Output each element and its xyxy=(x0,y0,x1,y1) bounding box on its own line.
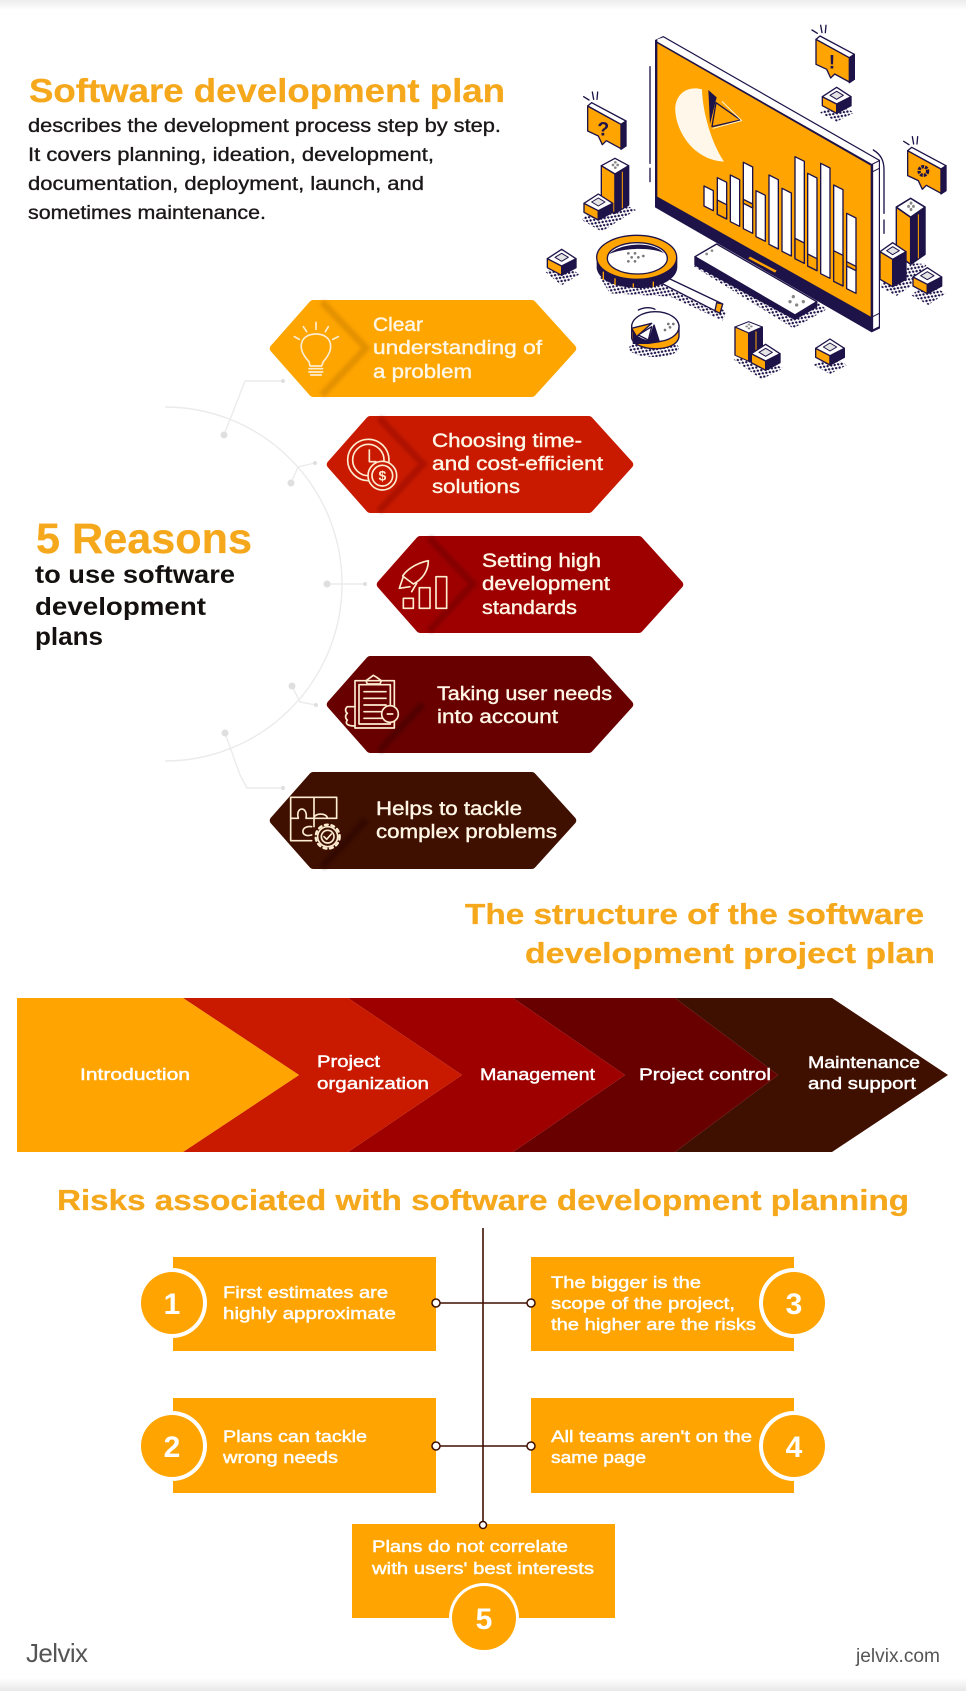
panel: risk 3: the higher are the risks xyxy=(551,1316,756,1334)
heading: 5 reasons: development xyxy=(35,593,207,621)
heading: 5 reasons: to use software xyxy=(35,561,235,589)
icon: clipboard xyxy=(346,675,398,728)
panel: reason 4 xyxy=(331,660,629,751)
panel: reason 4: Taking user needs xyxy=(437,684,612,705)
heading: structure of the plan: The structure of the software xyxy=(465,899,924,931)
icon: left tall block and cube xyxy=(584,158,629,220)
icon: question speech bubble xyxy=(584,92,626,149)
panel: risk 4: All teams aren't on the xyxy=(551,1428,752,1446)
panel: risk 1: highly approximate xyxy=(223,1305,396,1323)
chart: chevron process: Project control xyxy=(639,1066,771,1084)
central connector lines xyxy=(436,1228,531,1524)
panel: reason 1 xyxy=(274,302,572,395)
title: Software development plan xyxy=(29,72,505,109)
icon: clock and dollar xyxy=(348,439,397,490)
icon: bottom small cube xyxy=(816,339,844,365)
intro text block: sometimes maintenance. xyxy=(28,202,266,224)
panel: risk 3: The bigger is the xyxy=(551,1274,701,1292)
intro text block xyxy=(28,115,501,224)
panel: reason 3: Setting high xyxy=(482,551,601,572)
heading: 5 reasons: 5 Reasons xyxy=(36,515,252,563)
panel: reason 3: development xyxy=(482,574,611,595)
panel: reason 1: a problem xyxy=(373,362,472,383)
panel: reason 2: solutions xyxy=(432,477,520,498)
panel: risk 1: 1 xyxy=(164,1288,180,1321)
intro text block: It covers planning, ideation, development, xyxy=(28,144,434,166)
intro text block: documentation, deployment, launch, and xyxy=(28,173,424,195)
panel: risk 5: with users' best interests xyxy=(371,1560,594,1578)
panel: risk 1 xyxy=(130,1257,440,1351)
monitor stand base xyxy=(695,244,817,319)
icon: gear speech bubble xyxy=(904,137,946,194)
icon: 3d pie chart xyxy=(632,308,679,349)
panel: risk 3: 3 xyxy=(786,1288,802,1321)
icon: question speech bubble: ? xyxy=(597,119,609,140)
heading: 5 reasons: plans xyxy=(35,623,103,651)
icon: light bulb xyxy=(294,322,338,375)
panel: reason 1: Clear xyxy=(373,315,424,336)
screen pie chart xyxy=(675,88,742,162)
panel: risk 4: same page xyxy=(551,1449,646,1467)
panel: risk 2 xyxy=(130,1398,440,1493)
panel: reason 5: Helps to tackle xyxy=(376,799,522,820)
chart: chevron process: Management xyxy=(480,1066,595,1084)
icon: rocket and bars xyxy=(399,561,447,608)
monitor xyxy=(655,36,880,332)
panel: risk 2: 2 xyxy=(164,1431,180,1464)
panel: risk 2: Plans can tackle xyxy=(223,1428,367,1446)
icon: clock and dollar: $ xyxy=(378,468,386,484)
heading: risks: Risks associated with software development planning xyxy=(57,1185,909,1217)
chart: chevron process: Introduction xyxy=(80,1066,190,1084)
panel: risk 5: Plans do not correlate xyxy=(372,1538,568,1556)
chart: chevron process: Maintenance xyxy=(808,1054,920,1072)
icon: right tall block and cubes xyxy=(880,198,942,294)
footer url: jelvix.com xyxy=(855,1646,940,1667)
icon: bottom block and cube xyxy=(735,322,780,370)
intro text block: describes the development process step by step. xyxy=(28,115,501,137)
icon: puzzle and gear xyxy=(291,797,340,849)
dotted floor shadows xyxy=(545,103,946,379)
panel: reason 3: standards xyxy=(482,598,577,619)
icon: small cube top xyxy=(822,87,851,113)
chart: chevron process: organization xyxy=(317,1075,429,1093)
panel: reason 2 xyxy=(331,418,629,511)
panel: reason 5: complex problems xyxy=(376,822,557,843)
monitor motion lines xyxy=(650,67,884,233)
chart: chevron process xyxy=(17,998,948,1152)
panel: risk 4 xyxy=(527,1398,837,1493)
panel: risk 5: 5 xyxy=(476,1603,492,1636)
icon: small cube left xyxy=(547,249,576,275)
panel: risk 4: 4 xyxy=(786,1431,803,1464)
panel: risk 5 xyxy=(352,1522,615,1658)
panel: reason 4: into account xyxy=(437,707,559,728)
heading: structure of the plan: development project plan xyxy=(525,938,935,970)
illustration: isometric monitor with charts xyxy=(545,25,946,379)
icon: magnifying glass xyxy=(597,235,723,313)
panel: reason 2: and cost-efficient xyxy=(432,454,604,475)
chart: chevron process: and support xyxy=(808,1075,917,1093)
panel: risk 2: wrong needs xyxy=(222,1449,338,1467)
logo: Jelvix: Jelvix xyxy=(26,1638,88,1668)
panel: reason 3 xyxy=(381,538,679,631)
reasons arc with connectors xyxy=(165,379,367,790)
panel: risk 1: First estimates are xyxy=(223,1284,388,1302)
panel: reason 2: Choosing time- xyxy=(432,431,582,452)
heading: structure of the plan xyxy=(465,899,935,970)
panel: reason 5 xyxy=(274,776,572,867)
icon: exclamation speech bubble: ! xyxy=(829,53,835,74)
panel: risk 3 xyxy=(527,1257,837,1351)
panel: risk 3: scope of the project, xyxy=(551,1295,735,1313)
chart: chevron process: Project xyxy=(317,1053,381,1071)
icon: exclamation speech bubble xyxy=(812,25,854,83)
panel: reason 1: understanding of xyxy=(373,338,543,359)
screen bar chart xyxy=(704,157,856,293)
heading: 5 reasons xyxy=(35,515,252,651)
